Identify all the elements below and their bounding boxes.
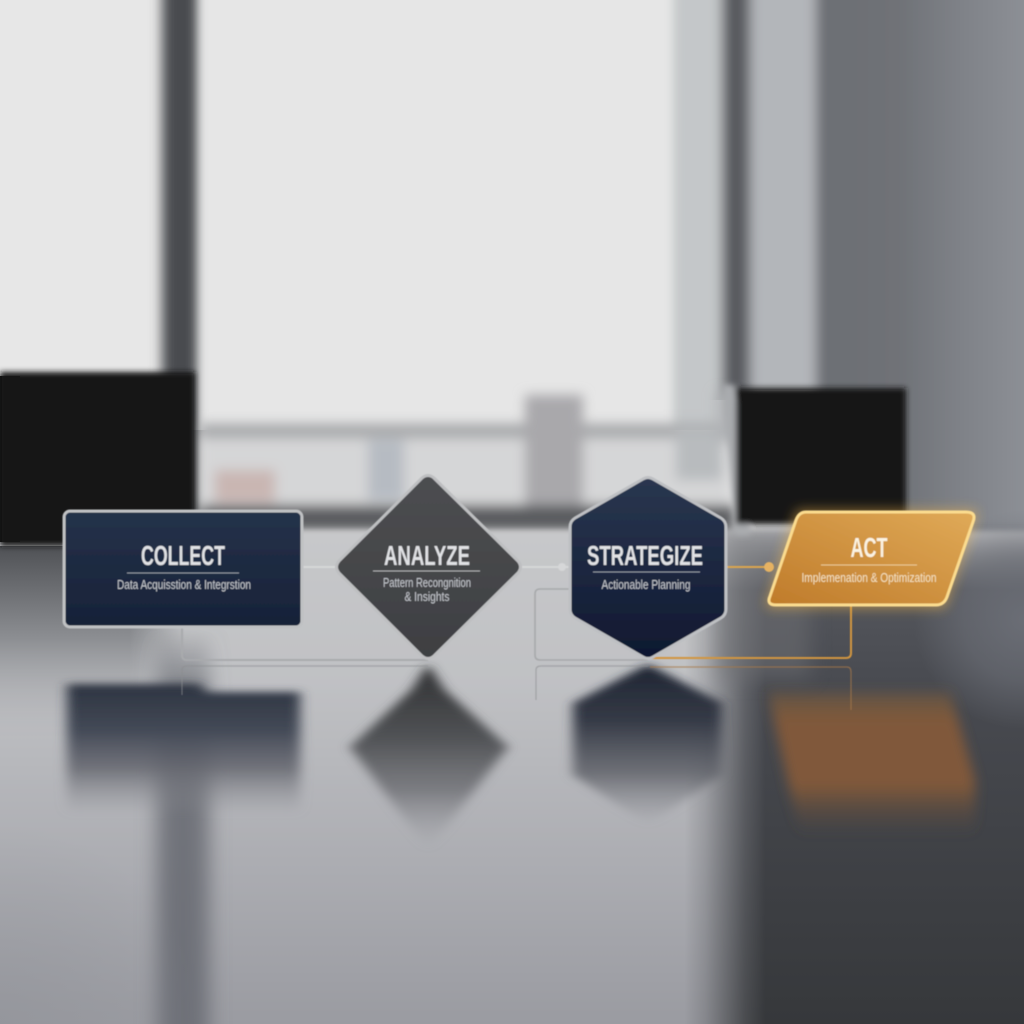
connector: collect to analyze (302, 566, 336, 568)
connector: strategize feedback loop (535, 589, 648, 660)
subtitle: act: Implemenation & Optimization (802, 570, 936, 585)
reflection: gold connector line (650, 667, 851, 710)
connector: act feedback line (650, 606, 851, 658)
subtitle: collect: Data Acquisstion & Integrstion (117, 577, 251, 592)
connector: collect feedback line (182, 627, 428, 660)
heading: act: ACT (850, 532, 888, 563)
reflection: connector lines (182, 666, 648, 700)
reflection: strategize (573, 664, 722, 825)
connector: analyze to strategize (522, 563, 570, 571)
heading: collect: COLLECT (141, 540, 225, 571)
reflection: analyze (350, 664, 508, 850)
heading: analyze: ANALYZE (384, 540, 470, 571)
reflections on the table (67, 664, 975, 850)
subtitle: analyze: Pattern Recongnition (383, 576, 471, 590)
subtitle: analyze line two: & Insights (404, 590, 450, 604)
reflection: collect (67, 684, 300, 815)
chairs (0, 372, 906, 546)
panel: collect (64, 511, 302, 627)
diagram: process flow (64, 476, 974, 660)
panel: act (769, 512, 974, 605)
reflection: act (768, 692, 975, 835)
panel: strategize (570, 478, 726, 658)
table (0, 560, 1024, 1024)
panel: analyze (336, 476, 520, 658)
subtitle: strategize: Actionable Planning (602, 577, 690, 592)
heading: strategize: STRATEGIZE (587, 540, 703, 571)
connector: strategize to act (726, 562, 774, 572)
